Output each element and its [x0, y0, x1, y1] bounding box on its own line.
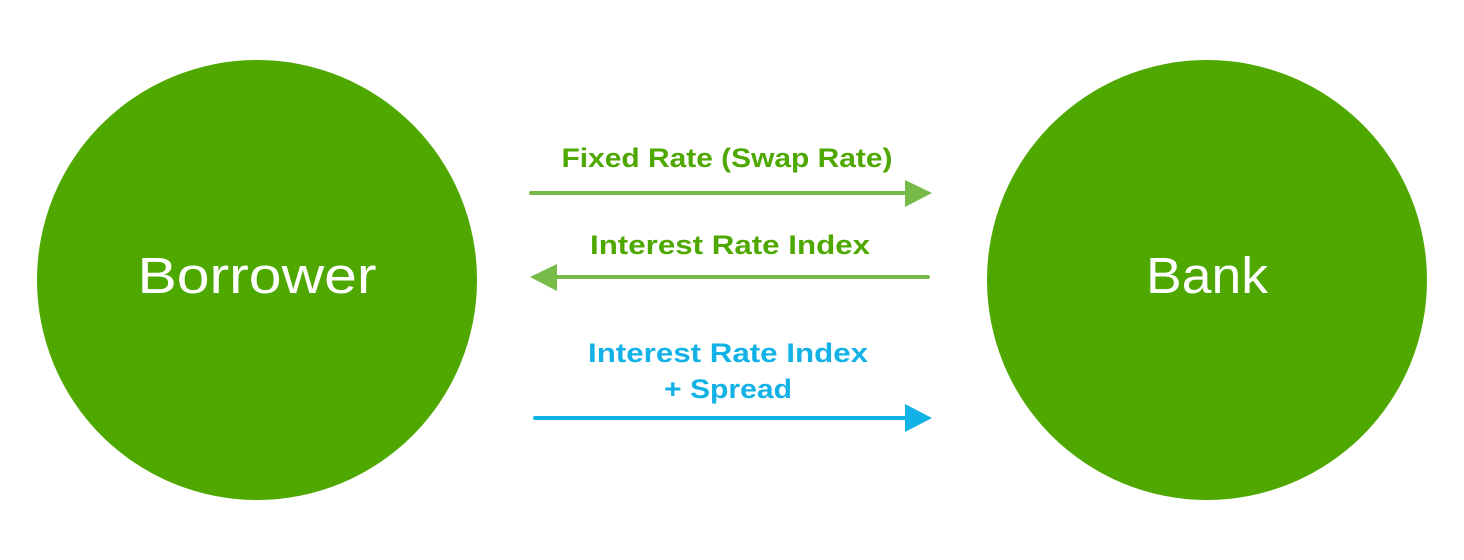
- circle: Bank: [987, 60, 1427, 500]
- label: Interest Rate Index + Spread: Interest Rate Index: [588, 338, 868, 368]
- arrow: index to borrower: [530, 264, 928, 291]
- label: Interest Rate Index + Spread: [588, 338, 868, 404]
- arrow: fixed rate to bank: [531, 180, 932, 207]
- circle: Bank: Bank: [1146, 247, 1269, 304]
- label: Interest Rate Index + Spread: + Spread: [664, 374, 792, 404]
- label: Fixed Rate (Swap Rate): Fixed Rate (Swap Rate): [562, 143, 892, 173]
- circle: Borrower: [37, 60, 477, 500]
- label: Interest Rate Index: Interest Rate Index: [590, 230, 870, 260]
- arrow: index plus spread to bank: [535, 404, 932, 432]
- circle: Borrower: Borrower: [138, 247, 377, 304]
